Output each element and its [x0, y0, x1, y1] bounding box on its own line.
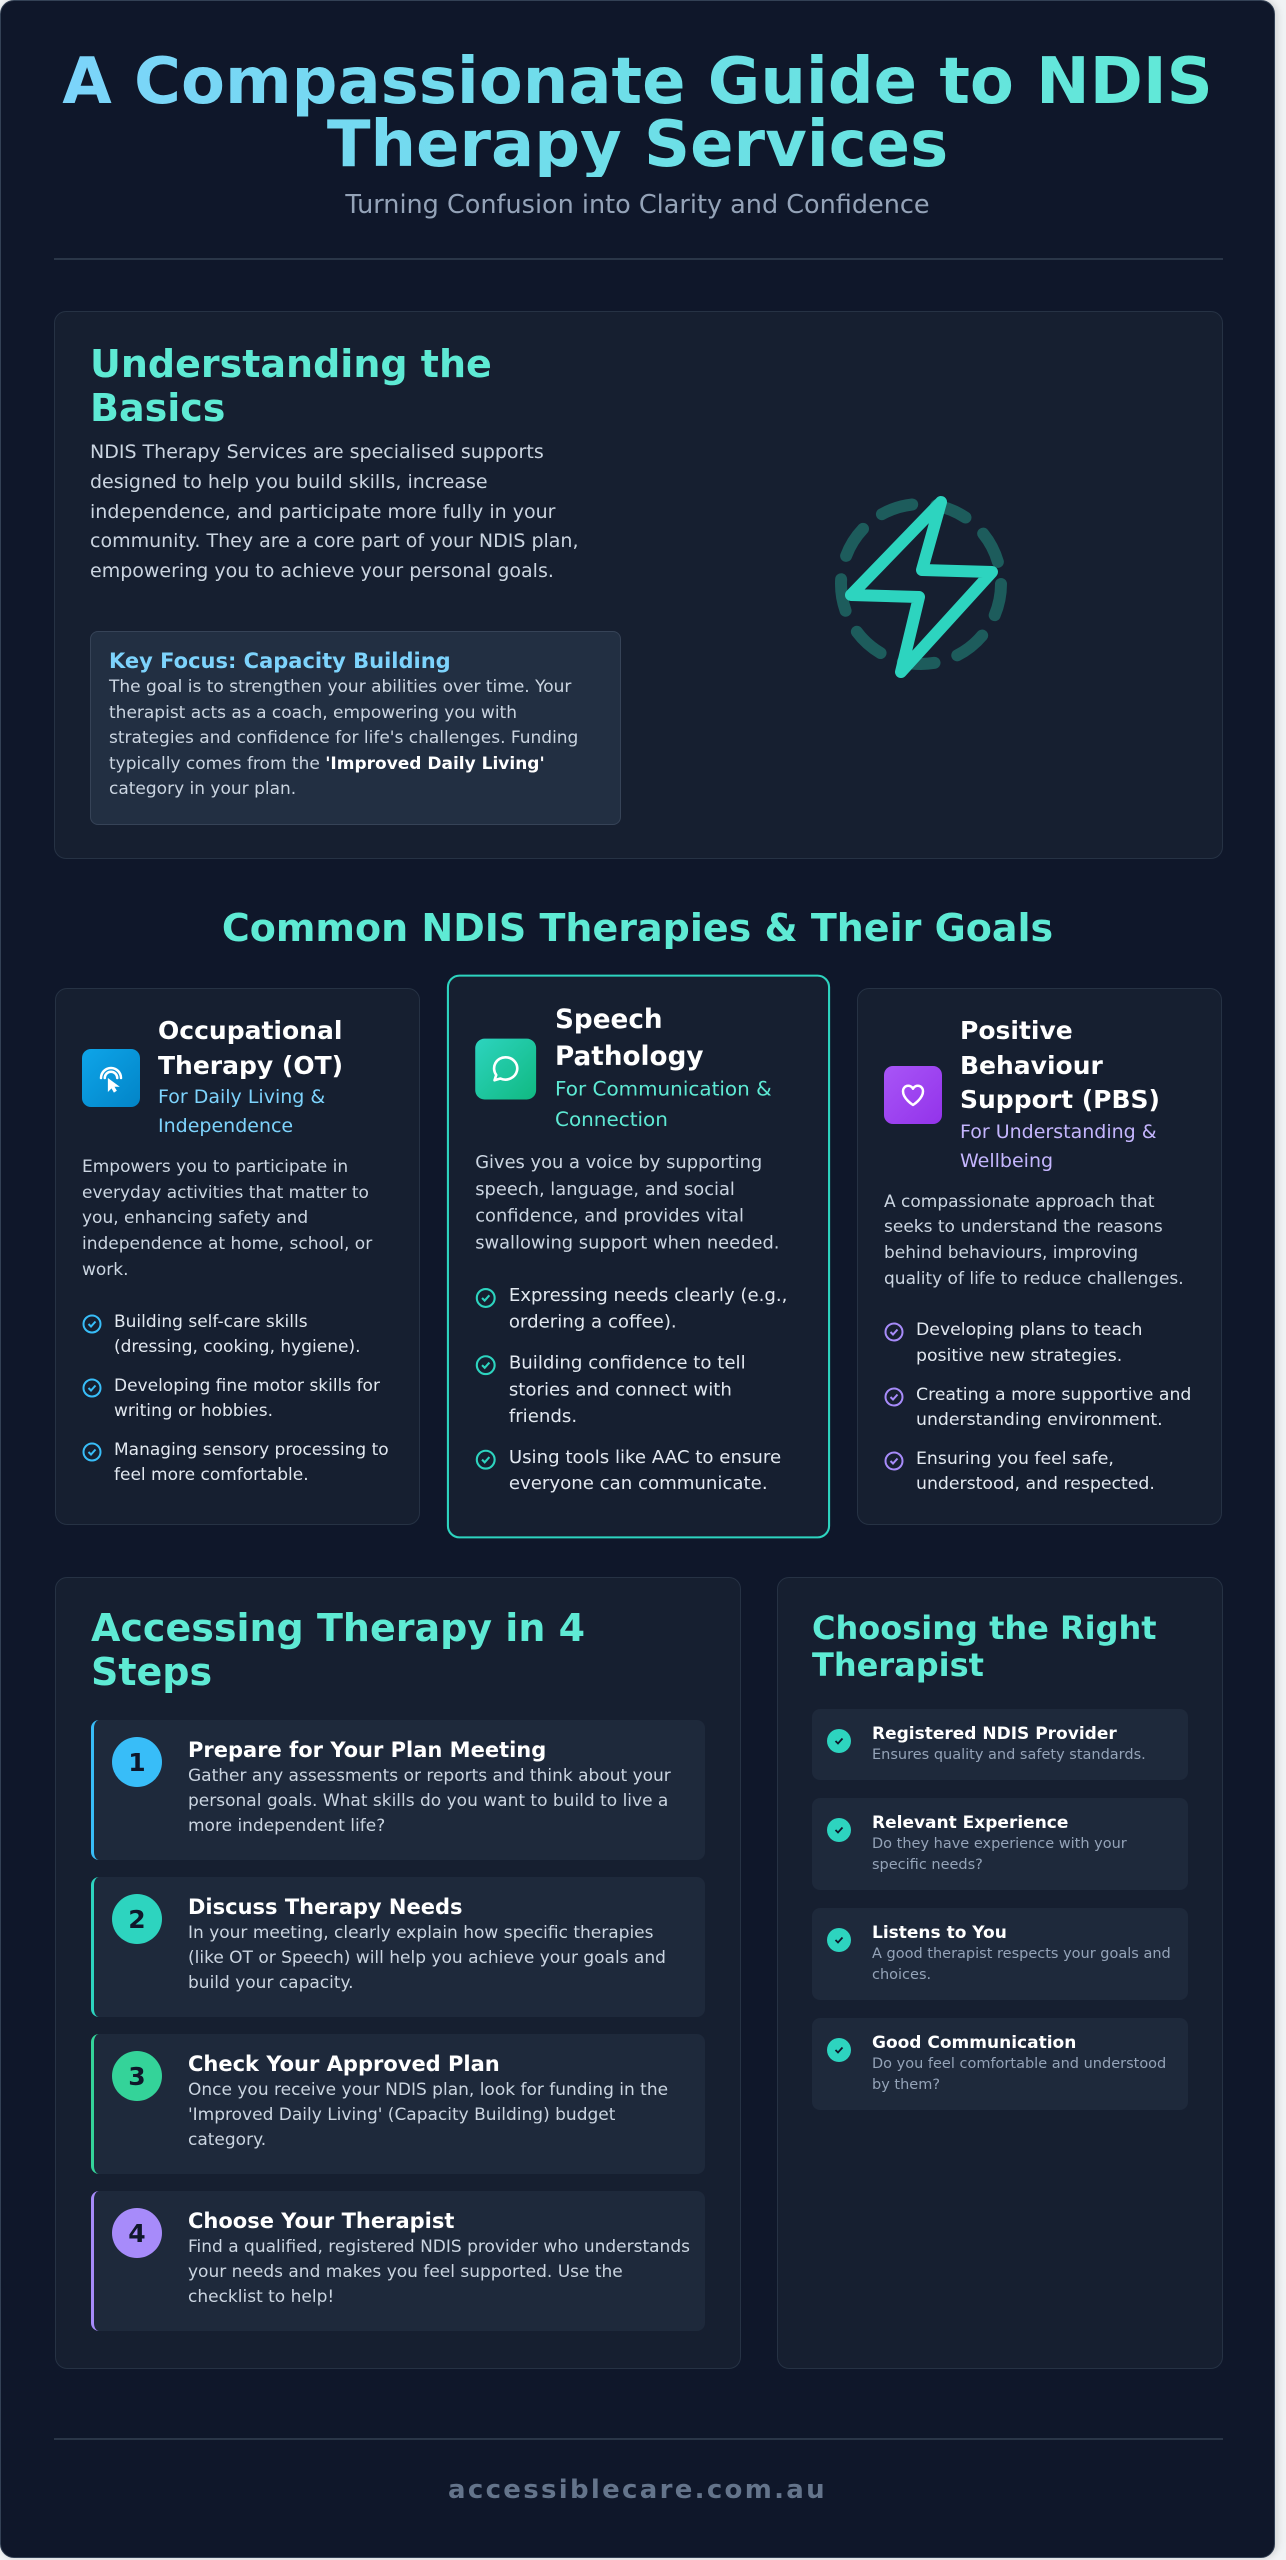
panel: positive behaviour support: Positive Behaviour Support (PBS)	[960, 1016, 1160, 1114]
step 2	[91, 1877, 705, 2017]
title: Therapy Services	[327, 108, 948, 182]
step 1: Gather any assessments or reports and think about your personal goals. What skills do you want to build to live a more independent life?	[188, 1766, 671, 1836]
panel: positive behaviour support	[857, 988, 1222, 1525]
step 4: Choose Your Therapist	[188, 2209, 454, 2233]
panel: positive behaviour support: Ensuring you feel safe, understood, and respected.	[916, 1449, 1155, 1494]
panel: speech pathology: Speech Pathology	[555, 1004, 703, 1071]
heading: choosing: Choosing the Right Therapist	[812, 1609, 1157, 1684]
title	[1, 51, 1274, 177]
step 2: Discuss Therapy Needs	[188, 1895, 463, 1919]
icon: heart	[884, 1066, 942, 1124]
step 4: Find a qualified, registered NDIS provider who understands your needs and makes you feel supported. Use the checklist to help!	[188, 2237, 690, 2307]
checklist item 2: Do they have experience with your specific needs?	[872, 1836, 1127, 1873]
icon: touch	[82, 1048, 140, 1106]
checklist item 1	[812, 1709, 1188, 1780]
checklist item 2	[812, 1798, 1188, 1890]
checklist item 2: Relevant Experience	[872, 1813, 1068, 1833]
panel: speech pathology: Gives you a voice by supporting speech, language, and social confidence, and provides vital swallowing support when needed.	[475, 1152, 779, 1254]
checklist item 3	[812, 1908, 1188, 2000]
footer: accessiblecare.com.au	[448, 2475, 827, 2505]
title: A Compassionate Guide to NDIS	[62, 45, 1213, 119]
subtitle: Turning Confusion into Clarity and Confidence	[345, 190, 930, 220]
panel: positive behaviour support: For Understanding & Wellbeing	[960, 1120, 1157, 1172]
step 3: 3	[128, 2062, 146, 2090]
panel: understanding the basics	[54, 311, 1223, 859]
panel: positive behaviour support: Developing plans to teach positive new strategies.	[916, 1320, 1142, 1366]
step 4	[91, 2191, 705, 2331]
checklist item 3: Listens to You	[872, 1923, 1007, 1943]
step 1: 1	[128, 1748, 146, 1776]
step 1: Prepare for Your Plan Meeting	[188, 1738, 546, 1762]
heading: understanding the basics: Understanding the Basics	[90, 342, 492, 430]
step 3: Once you receive your NDIS plan, look for funding in the 'Improved Daily Living' (Capacity Building) budget category.	[188, 2080, 668, 2150]
panel: occupational therapy	[55, 988, 420, 1525]
panel: speech pathology: Expressing needs clearly (e.g., ordering a coffee).	[509, 1285, 787, 1333]
checklist item 4: Do you feel comfortable and understood by them?	[872, 2056, 1166, 2093]
panel: speech pathology: For Communication & Connection	[555, 1077, 772, 1131]
panel: occupational therapy: Building self-care skills (dressing, cooking, hygiene).	[114, 1312, 360, 1357]
heading: steps: Accessing Therapy in 4 Steps	[91, 1606, 585, 1694]
panel: accessing therapy steps	[55, 1577, 741, 2369]
callout: key focus	[90, 631, 621, 825]
panel: speech pathology	[447, 975, 830, 1538]
panel: positive behaviour support: A compassionate approach that seeks to understand the reasons behind behaviours, improving quality of life to reduce challenges.	[884, 1192, 1184, 1289]
checklist item 1: Ensures quality and safety standards.	[872, 1747, 1146, 1763]
checklist item 1: Registered NDIS Provider	[872, 1724, 1117, 1744]
icon: speech bubble	[475, 1038, 536, 1099]
step 3: Check Your Approved Plan	[188, 2052, 500, 2076]
icon: lightning bolt	[835, 496, 1007, 678]
step 3	[91, 2034, 705, 2174]
panel: choosing the right therapist	[777, 1577, 1223, 2369]
step 2: In your meeting, clearly explain how specific therapies (like OT or Speech) will help you achieve your goals and build your capacity.	[188, 1923, 666, 1993]
checklist item 4	[812, 2018, 1188, 2110]
heading: common therapies: Common NDIS Therapies & Their Goals	[222, 906, 1053, 950]
text block: intro: NDIS Therapy Services are specialised supports designed to help you build skills, increase independence, and participate more fully in your community. They are a core part of your NDIS plan, empowering you to achieve your personal goals.	[90, 441, 579, 582]
checklist item 4: Good Communication	[872, 2033, 1076, 2053]
panel: speech pathology: Using tools like AAC to ensure everyone can communicate.	[509, 1447, 781, 1495]
panel: speech pathology: Building confidence to tell stories and connect with friends.	[509, 1353, 746, 1427]
panel: occupational therapy: For Daily Living & Independence	[158, 1086, 325, 1137]
step 4: 4	[128, 2218, 146, 2248]
panel: occupational therapy: Developing fine motor skills for writing or hobbies.	[114, 1376, 380, 1421]
step 1	[91, 1720, 705, 1860]
callout: key focus: Key Focus: Capacity Building	[109, 649, 451, 673]
checklist item 3: A good therapist respects your goals and choices.	[872, 1946, 1171, 1983]
panel: positive behaviour support: Creating a more supportive and understanding environment.	[916, 1384, 1191, 1430]
step 2: 2	[128, 1904, 146, 1934]
callout: key focus: The goal is to strengthen your abilities over time. Your therapist acts as a coach, empowering you with strategies and confidence for life's challenges. Funding typically comes from the 'Improved Daily Living' category in your plan.	[109, 677, 578, 799]
panel: occupational therapy: Managing sensory processing to feel more comfortable.	[114, 1440, 389, 1485]
panel: occupational therapy: Empowers you to participate in everyday activities that matter to you, enhancing safety and independence at home, school, or work.	[82, 1157, 372, 1280]
panel: occupational therapy: Occupational Therapy (OT)	[158, 1016, 343, 1080]
